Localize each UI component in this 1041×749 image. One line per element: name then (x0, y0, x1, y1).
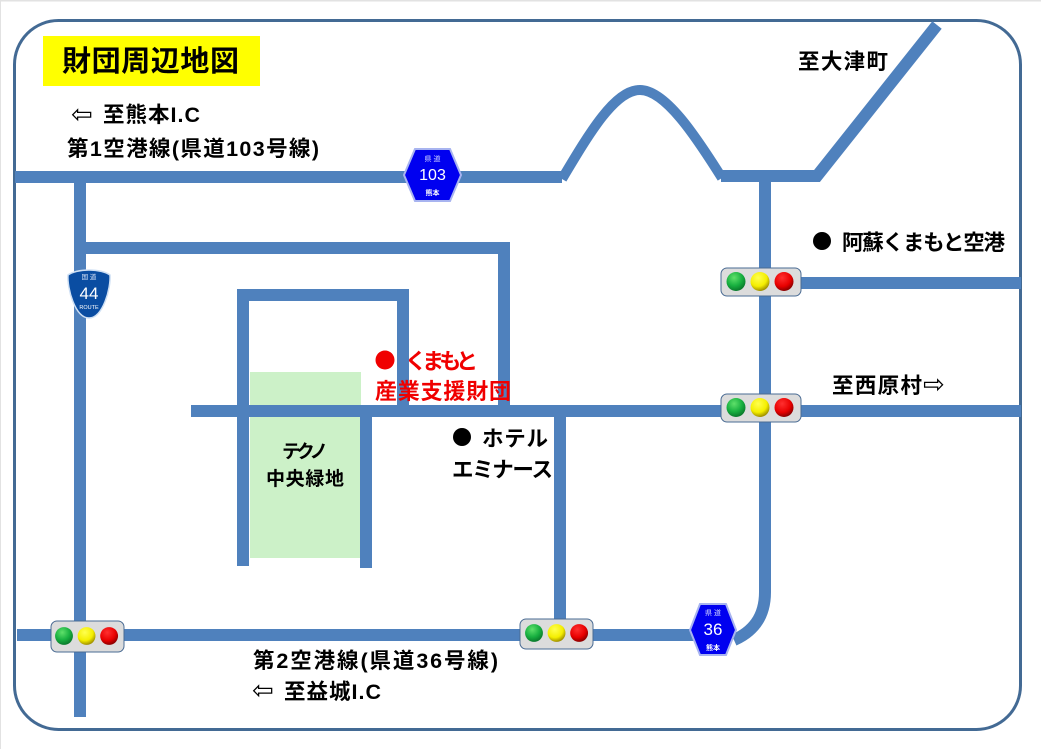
road: west vertical (74, 177, 86, 717)
label: 至益城I.C: 至益城I.C (284, 679, 381, 704)
road: 第2空港線 (17, 629, 700, 641)
label: くまもと産業支援財団 (375, 349, 511, 404)
icon: national route 44 sign (68, 270, 110, 318)
icon: route 36 sign: 県 道 (705, 608, 721, 617)
road: to 大津町 (721, 25, 937, 176)
label: 至西原村: 至西原村 (832, 374, 922, 398)
icon: national route 44 sign: 国 道 (82, 272, 97, 281)
icon: route 103 sign: 熊本 (426, 188, 440, 197)
traffic signal: hotel junction (520, 619, 593, 649)
icon: route 36 sign: 36 (704, 620, 722, 639)
icon: route 36 sign (690, 604, 736, 655)
label: ホテルエミナース: エミナース (452, 458, 553, 482)
road: 第1空港線 (15, 171, 562, 183)
road: park east side (360, 411, 372, 568)
icon: route 103 sign: 103 (419, 167, 446, 184)
label: 至熊本I.C: ⇦ (71, 100, 93, 130)
title (43, 36, 260, 86)
park: テクノ中央緑地 (250, 372, 361, 558)
road: to airport (765, 277, 1021, 289)
road: north side street (80, 248, 504, 411)
label: 至熊本I.C: 至熊本I.C (103, 103, 200, 127)
road: east vertical with curve to 36 (734, 176, 765, 640)
label: 至益城I.C (252, 676, 381, 706)
road: hotel street (554, 411, 566, 630)
traffic signal: route 44 junction (51, 621, 124, 652)
label: 至益城I.C: ⇦ (252, 676, 274, 706)
label: 第1空港線: 第1空港線(県道103号線) (67, 137, 319, 161)
traffic signal: airport junction (721, 268, 801, 296)
title: 財団周辺地図 (62, 45, 239, 78)
road: curved section of 第1空港線 (562, 90, 722, 179)
label: テクノ中央緑地 (266, 441, 344, 490)
label: くまもと産業支援財団: 産業支援財団 (375, 379, 511, 404)
icon: route 103 sign: 県 道 (425, 154, 440, 163)
icon: national route 44 sign: ROUTE (79, 305, 99, 311)
label: 至西原村: ⇨ (923, 370, 945, 400)
label: 至熊本I.C (71, 100, 200, 130)
label: 第2空港線: 第2空港線(県道36号線) (253, 649, 498, 673)
label: 阿蘇くまもと空港: 阿蘇くまもと空港 (842, 231, 1005, 255)
label: 至大津町: 至大津町 (798, 50, 888, 74)
label: 至西原村 (832, 370, 945, 400)
road: 西原村 east-west (191, 405, 1021, 417)
traffic signal: 西原村 junction (721, 394, 801, 422)
icon: national route 44 sign: 44 (80, 284, 98, 303)
label: ホテルエミナース (452, 427, 553, 482)
label: ホテルエミナース: ホテル (482, 427, 548, 451)
label: くまもと産業支援財団: くまもと (405, 349, 478, 374)
road: industrial loop (243, 295, 403, 566)
label: テクノ中央緑地: テクノ (282, 441, 328, 462)
icon: route 36 sign: 熊本 (706, 643, 720, 652)
label: テクノ中央緑地: 中央緑地 (266, 468, 344, 490)
icon: route 103 sign (404, 149, 461, 201)
